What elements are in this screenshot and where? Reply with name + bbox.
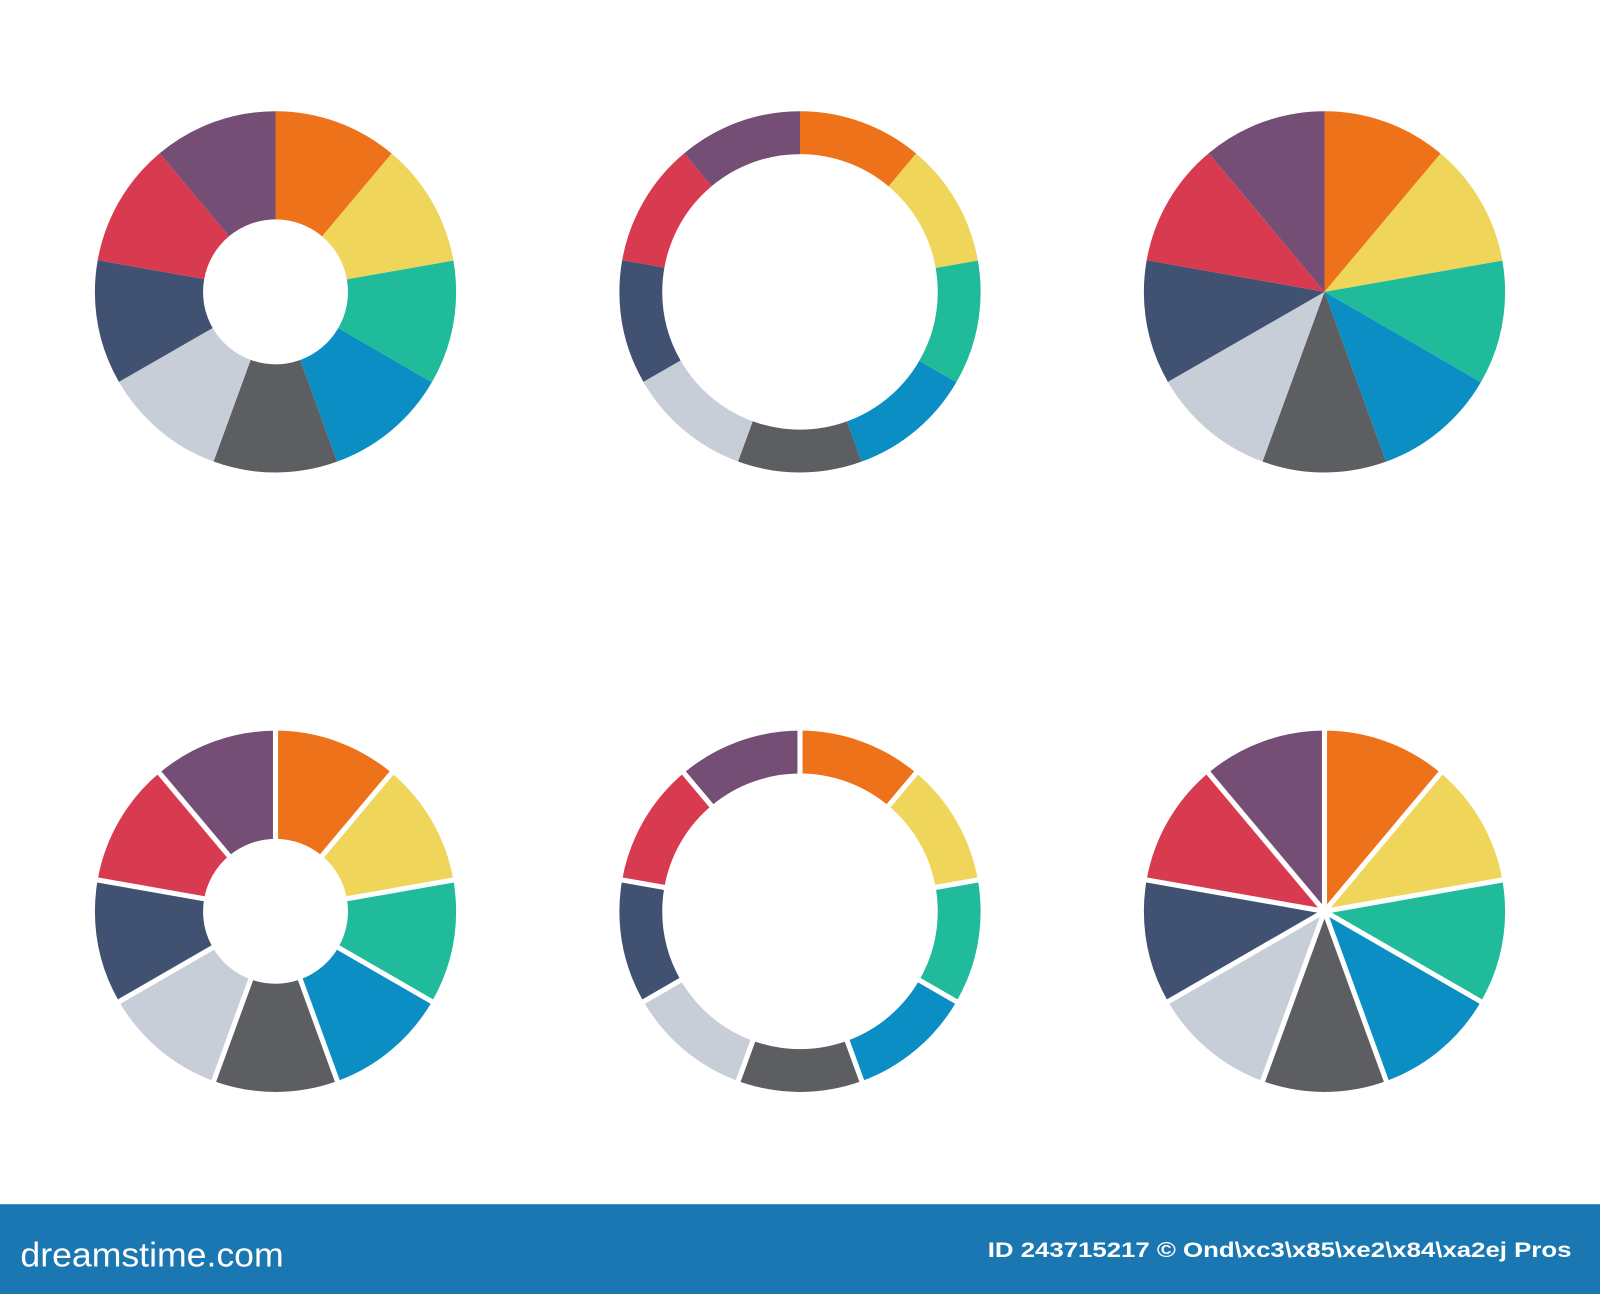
chart: thin ring top-center: [641, 133, 959, 451]
chart: pie with gaps bottom-right: [1139, 723, 1510, 1089]
footer bar: [0, 1204, 1600, 1294]
chart: pie top-right: [1234, 202, 1415, 382]
footer logo text: dreamstime.com: [20, 1236, 284, 1274]
footer image id text: ID 243715217 © Ond\xc3\x85\xe2\x84\xa2ej Pros: [988, 1238, 1572, 1262]
chart: donut thick top-left: [149, 165, 402, 418]
chart: thin ring with gaps bottom-center: [614, 723, 986, 1089]
chart: donut thick with gaps bottom-left: [90, 723, 461, 1089]
